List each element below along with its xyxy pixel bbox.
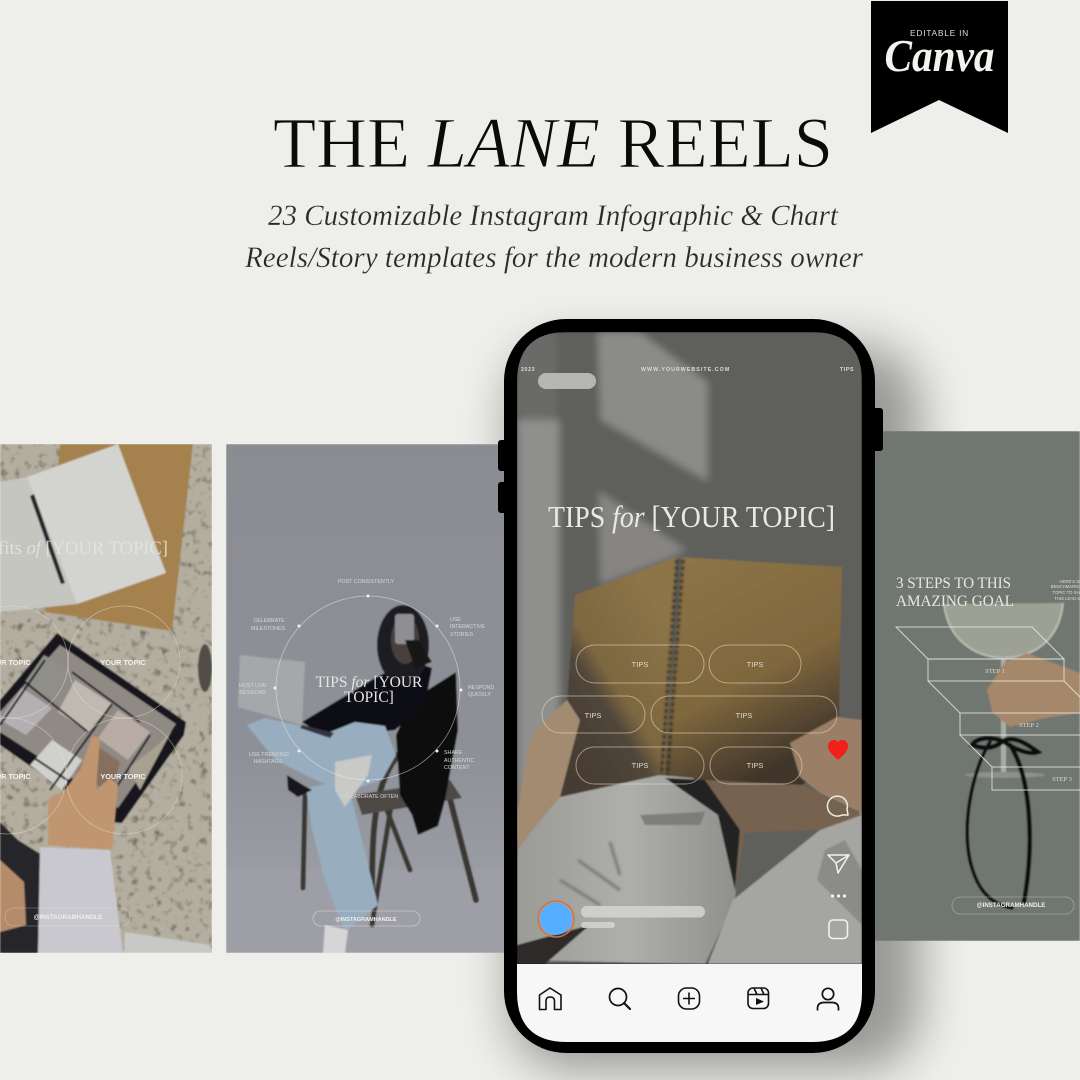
handle pill <box>952 897 1074 914</box>
status text <box>521 367 854 373</box>
username bars <box>581 906 705 928</box>
title: THE LANE REELS <box>273 103 833 183</box>
circle labels: YOUR TOPIC <box>100 772 146 781</box>
ring labels <box>239 579 494 800</box>
ring labels: QUICKLY <box>468 692 491 698</box>
photo: glass with ribbon <box>870 431 1080 941</box>
phone screen <box>517 332 862 1042</box>
tips pills: TIPS <box>747 660 763 669</box>
phone shadow <box>510 345 920 1070</box>
photo: woman on chair with laptop <box>226 444 506 953</box>
subtitle <box>244 199 863 274</box>
circle labels <box>0 658 146 781</box>
ring labels: HASHTAGS <box>254 759 283 765</box>
circle labels: YOUR TOPIC <box>100 658 146 667</box>
handle pill: @INSTAGRAMHANDLE <box>335 917 397 923</box>
avatar <box>538 901 574 937</box>
ring labels: CONTENT <box>444 765 470 771</box>
handle pill <box>5 908 130 926</box>
ring labels: STORIES <box>450 632 474 638</box>
icon: heart <box>828 740 848 760</box>
handle pill: @INSTAGRAMHANDLE <box>977 902 1045 909</box>
venn circles <box>0 606 182 834</box>
phone side buttons <box>498 408 883 513</box>
tips pills: TIPS <box>632 660 648 669</box>
bottom nav bar <box>517 964 862 1042</box>
ring heading: TIPS for [YOUR <box>316 674 422 691</box>
badge logotype: Canva <box>884 30 994 81</box>
handle pill: @INSTAGRAMHANDLE <box>34 914 102 921</box>
step diagram <box>896 627 1080 790</box>
panel: three steps template <box>870 431 1080 941</box>
ring dots <box>274 594 462 782</box>
icon: more dots <box>831 894 846 898</box>
status text: WWW.YOURWEBSITE.COM <box>641 367 730 373</box>
ring labels: AUTHENTIC <box>444 758 474 764</box>
badge caption: EDITABLE IN <box>910 28 969 38</box>
tips pills: TIPS <box>747 761 763 770</box>
ring labels: USE TRENDING <box>249 752 289 758</box>
ring labels: USE <box>450 617 461 623</box>
heading: 3 STEPS TO THIS <box>896 575 1011 592</box>
description text <box>1051 580 1080 600</box>
tips pills <box>542 645 837 784</box>
icon: plus <box>678 988 700 1009</box>
photo: rug, notebook and tablet <box>0 444 212 953</box>
step labels: STEP 2 <box>1019 722 1039 729</box>
ring labels: SHARE <box>444 750 463 756</box>
tips pills: TIPS <box>632 761 648 770</box>
tips pills: TIPS <box>736 711 752 720</box>
step labels: STEP 3 <box>1052 776 1072 783</box>
ring <box>274 594 462 782</box>
icon: audio square <box>829 920 848 938</box>
icon: search <box>610 988 630 1009</box>
icon: comment <box>827 796 848 816</box>
ring labels: MILESTONES <box>251 626 285 632</box>
badge: editable in Canva <box>871 1 1008 133</box>
ring labels: COLLABORATE OFTEN <box>340 794 398 800</box>
ring labels: INTERACTIVE <box>450 624 485 630</box>
icon: home <box>540 988 561 1010</box>
handle pill <box>313 911 420 926</box>
step labels: STEP 1 <box>985 668 1005 675</box>
screen heading: TIPS for [YOUR TOPIC] <box>548 499 835 534</box>
ring labels: SESSIONS <box>239 690 267 696</box>
ring labels: POST CONSISTENTLY <box>338 579 394 585</box>
subtitle line 1: 23 Customizable Instagram Infographic & Chart <box>268 199 839 232</box>
ring heading: TOPIC] <box>344 689 394 706</box>
phone body <box>504 319 875 1053</box>
icon: reels <box>748 988 768 1008</box>
screen photo: woman holding notebook <box>517 332 862 964</box>
heading: AMAZING GOAL <box>896 593 1014 610</box>
ring labels: CELEBRATE <box>253 618 285 624</box>
tips pills: TIPS <box>585 711 601 720</box>
phone mockup <box>498 319 883 1053</box>
ring labels: HOST LIVE <box>239 683 267 689</box>
status text: TIPS <box>840 367 854 373</box>
status pill <box>538 373 596 389</box>
icon: profile <box>818 988 838 1010</box>
status text: 2023 <box>521 367 535 373</box>
panel: benefits template with tablet photo <box>0 444 212 953</box>
subtitle line 2: Reels/Story templates for the modern business owner <box>244 241 863 274</box>
icon: send <box>828 855 849 873</box>
panel: tips circle template with seated woman <box>226 444 506 953</box>
ring labels: RESPOND <box>468 685 494 691</box>
step labels <box>985 668 1072 783</box>
